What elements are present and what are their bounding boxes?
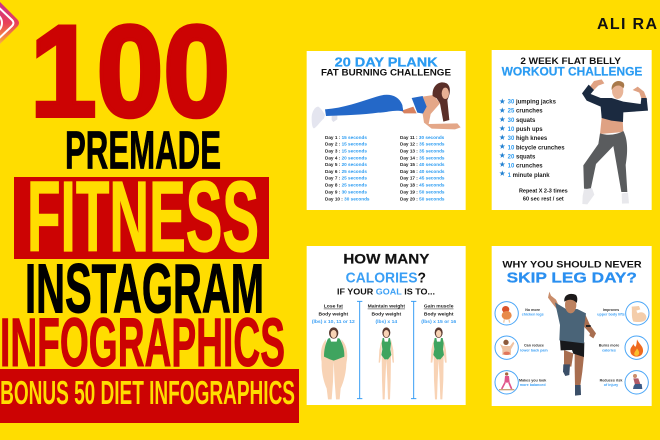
list: day 11 to 20: Day 12 : 35 seconds	[400, 142, 445, 147]
benefit: lower back pain	[495, 336, 548, 359]
banner: bonus: +BONUS 50 DIET INFOGRAPHICS	[0, 374, 295, 411]
banner: fitness	[14, 161, 269, 273]
benefit: balanced look: Makes you look	[519, 378, 547, 382]
benefit: lower back pain: lower back pain	[520, 348, 548, 352]
banner: fitness: FITNESS	[27, 161, 259, 273]
list: day 11 to 20: Day 11 : 30 seconds	[400, 135, 445, 140]
column: maintain weight: Body weight	[372, 312, 401, 318]
list: exercises: 30 jumping jacks	[508, 100, 557, 106]
author name: ALI RA	[597, 16, 657, 33]
benefit: reduce injury: Reduces risk	[600, 378, 623, 382]
list: day 11 to 20: Day 15 : 40 seconds	[400, 162, 445, 167]
heading: premade: PREMADE	[65, 120, 221, 180]
figure: woman in plank	[312, 82, 461, 129]
figure: medium body	[379, 327, 394, 399]
panel: leg day	[492, 246, 652, 406]
list: exercises: 10 push ups	[508, 127, 543, 133]
note: repeat instructions: Repeat X 2-3 times	[519, 188, 568, 194]
list: day 11 to 20	[400, 135, 445, 201]
icons: stars: ★	[499, 98, 506, 106]
list: day 11 to 20: Day 18 : 45 seconds	[400, 183, 445, 188]
icons: stars: ★	[499, 116, 506, 124]
panel: plank challenge	[307, 51, 466, 210]
title block	[0, 0, 299, 423]
benefit: reduce injury	[600, 371, 648, 394]
heading: infographics: INFOGRAPHICS	[0, 304, 285, 381]
figure: woman flexing	[582, 79, 648, 204]
benefit: chicken legs: chicken legs	[522, 313, 544, 317]
heading: flat belly: 2 WEEK FLAT BELLY	[520, 56, 621, 66]
benefit: chicken legs	[495, 302, 544, 325]
list: day 11 to 20: Day 17 : 45 seconds	[400, 176, 445, 181]
list: day 1 to 10: Day 5 : 20 seconds	[325, 162, 367, 167]
subheading: goal: IF YOUR GOAL IS TO...	[337, 286, 435, 296]
list: day 1 to 10: Day 7 : 25 seconds	[325, 176, 367, 181]
list: day 11 to 20: Day 16 : 40 seconds	[400, 169, 445, 174]
note: repeat instructions	[519, 188, 568, 203]
benefit: upper body lifts	[597, 302, 649, 325]
column: lose fat: (lbs) x 10, 11 or 12	[312, 319, 355, 325]
list: day 1 to 10: Day 2 : 15 seconds	[325, 142, 367, 147]
benefit: burns calories: Burns more	[599, 344, 619, 348]
banner: bonus	[0, 369, 299, 423]
column: gain muscle: (lbs) x 15 or 16	[421, 319, 456, 325]
dividers	[357, 301, 416, 399]
icons: stars: ★	[499, 143, 506, 151]
benefit: lower back pain: Can reduce	[524, 344, 544, 348]
list: day 11 to 20: Day 19 : 50 seconds	[400, 189, 445, 194]
subheading: plank: FAT BURNING CHALLENGE	[321, 68, 451, 78]
column: maintain weight: (lbs) x 14	[376, 319, 397, 325]
heading: 100: 100	[30, 0, 230, 144]
list: day 1 to 10: Day 1 : 15 seconds	[325, 135, 367, 140]
list: exercises: 20 squats	[508, 155, 536, 161]
icons: stars: ★	[499, 170, 506, 178]
benefit: balanced look	[495, 371, 547, 394]
list: day 11 to 20: Day 14 : 35 seconds	[400, 155, 445, 160]
heading: why you should never: WHY YOU SHOULD NEVER	[502, 260, 642, 270]
column: lose fat: Body weight	[319, 312, 348, 318]
panel: calories	[307, 246, 466, 405]
heading: skip leg day: SKIP LEG DAY?	[507, 271, 637, 287]
list: exercises	[508, 100, 565, 179]
column: lose fat: Lose fat	[324, 304, 343, 310]
list: day 11 to 20: Day 20 : 50 seconds	[400, 196, 445, 201]
list: day 1 to 10: Day 9 : 30 seconds	[325, 189, 367, 194]
list: day 1 to 10: Day 3 : 15 seconds	[325, 149, 367, 154]
benefit: upper body lifts: upper body lifts	[597, 313, 625, 317]
benefit: burns calories: calories	[602, 348, 616, 352]
column: lose fat	[312, 304, 355, 325]
heading: calories: CALORIES?	[346, 271, 426, 287]
icons: stars: ★	[499, 134, 506, 142]
icons: stars: ★	[499, 161, 506, 169]
benefit: chicken legs: No more	[525, 308, 540, 312]
benefit: reduce injury: of injury	[604, 383, 619, 387]
column: gain muscle: Gain muscle	[424, 304, 454, 310]
icons: stars: ★	[499, 152, 506, 160]
panel: flat belly challenge	[492, 50, 652, 210]
list: day 11 to 20: Day 13 : 35 seconds	[400, 149, 445, 154]
column: gain muscle	[421, 304, 456, 325]
subheading: workout challenge: WORKOUT CHALLENGE	[502, 64, 642, 78]
list: day 1 to 10: Day 10 : 30 seconds	[325, 196, 370, 201]
benefit: upper body lifts: Improves	[603, 308, 619, 312]
list: day 1 to 10	[325, 135, 370, 201]
figure: larger body	[321, 327, 347, 399]
benefit: burns calories	[599, 336, 648, 359]
list: exercises: 10 crunches	[508, 164, 543, 170]
list: day 1 to 10: Day 6 : 25 seconds	[325, 169, 367, 174]
heading: instagram: INSTAGRAM	[25, 250, 264, 328]
list: exercises: 25 crunches	[508, 109, 543, 115]
heading: how many: HOW MANY	[343, 250, 430, 266]
icons: stars: ★	[499, 107, 506, 115]
list: exercises: 10 bicycle crunches	[508, 145, 565, 151]
benefit: balanced look: more balanced	[520, 383, 546, 387]
figure: athletic body	[431, 327, 447, 399]
list: exercises: 30 high knees	[508, 136, 548, 142]
figure: running man	[548, 292, 596, 396]
icon: instagram logo	[0, 0, 19, 52]
column: maintain weight	[368, 304, 405, 325]
heading: plank: 20 DAY PLANK	[335, 55, 438, 70]
icons: stars	[499, 98, 506, 178]
column: gain muscle: Body weight	[424, 312, 454, 318]
list: day 1 to 10: Day 8 : 25 seconds	[325, 183, 367, 188]
column: maintain weight: Maintain weight	[368, 304, 405, 310]
list: day 1 to 10: Day 4 : 20 seconds	[325, 155, 367, 160]
note: repeat instructions: 60 sec rest / set	[523, 197, 564, 203]
icons: stars: ★	[499, 125, 506, 133]
list: exercises: 1 minute plank	[508, 173, 550, 179]
list: exercises: 30 squats	[508, 118, 536, 124]
